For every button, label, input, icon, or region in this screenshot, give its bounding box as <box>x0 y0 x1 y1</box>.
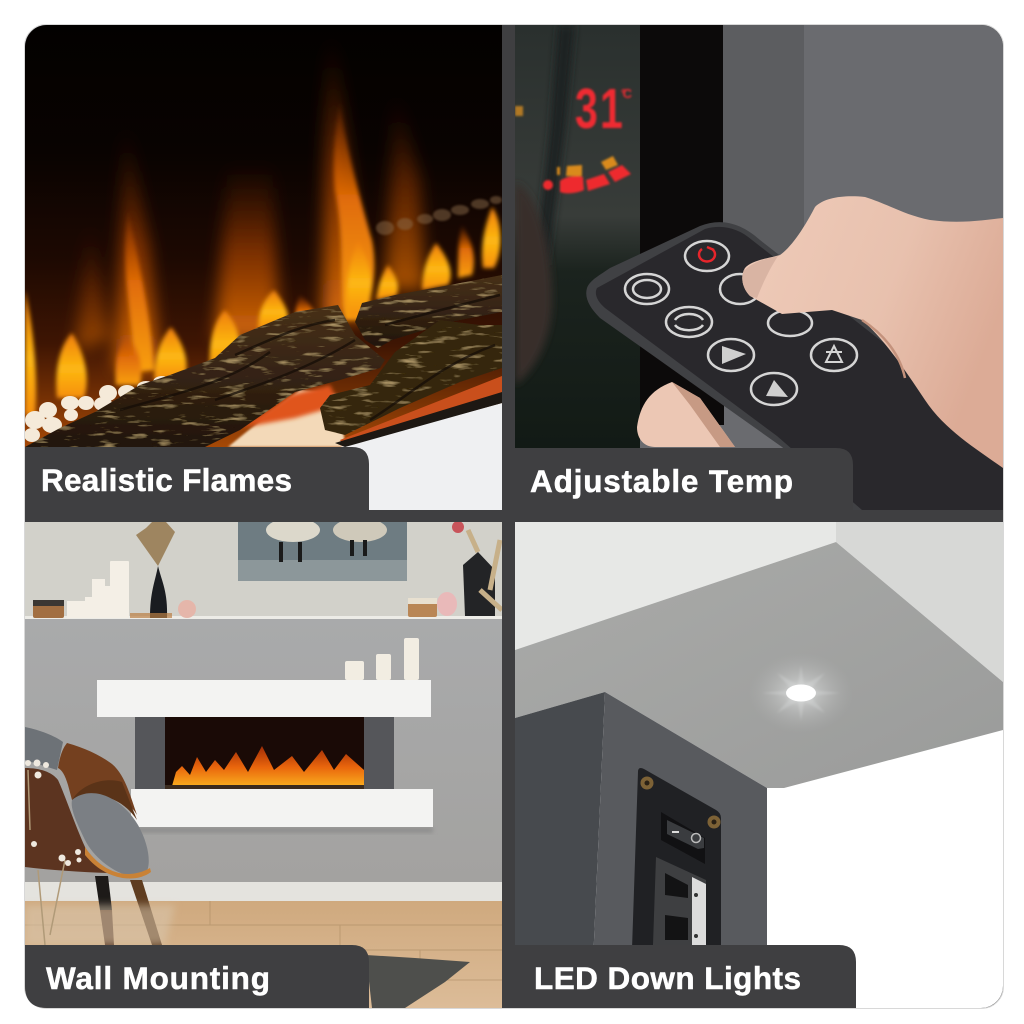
pebbles <box>24 376 171 442</box>
panel: adjustable temp <box>515 25 1003 510</box>
label: adjustable temp: Adjustable Temp <box>530 463 793 499</box>
shelf decor <box>67 561 129 618</box>
temperature display: 1 <box>600 76 623 141</box>
glowing coals <box>228 390 345 447</box>
temperature display: 3 <box>575 76 598 141</box>
fireplace <box>97 680 433 833</box>
painting <box>238 518 407 581</box>
label: wall mounting: Wall Mounting <box>46 960 270 996</box>
dim flame streaks <box>75 30 425 370</box>
panel: wall mounting <box>25 518 502 1008</box>
dried flowers <box>25 760 175 945</box>
bright flames <box>25 100 501 415</box>
panel: realistic flames <box>24 25 502 510</box>
label: realistic flames: Realistic Flames <box>41 462 292 498</box>
remote buttons <box>625 241 857 405</box>
label: adjustable temp <box>503 448 853 510</box>
rug <box>366 955 470 1008</box>
chair <box>25 727 162 945</box>
switch plate <box>632 768 721 945</box>
label: LED down lights: LED Down Lights <box>534 960 801 996</box>
panel: LED down lights <box>515 522 1003 1008</box>
label: LED down lights <box>503 945 856 1008</box>
remote <box>586 222 884 510</box>
mantel candles <box>345 638 419 680</box>
LED light <box>763 664 839 722</box>
logs <box>25 275 502 447</box>
reflected pebbles <box>376 196 502 235</box>
white mantel <box>340 403 502 510</box>
temperature display: °C <box>621 86 633 101</box>
hand <box>742 196 1003 468</box>
label: realistic flames <box>25 447 369 510</box>
temperature display <box>515 76 633 193</box>
label: wall mounting <box>25 945 369 1008</box>
